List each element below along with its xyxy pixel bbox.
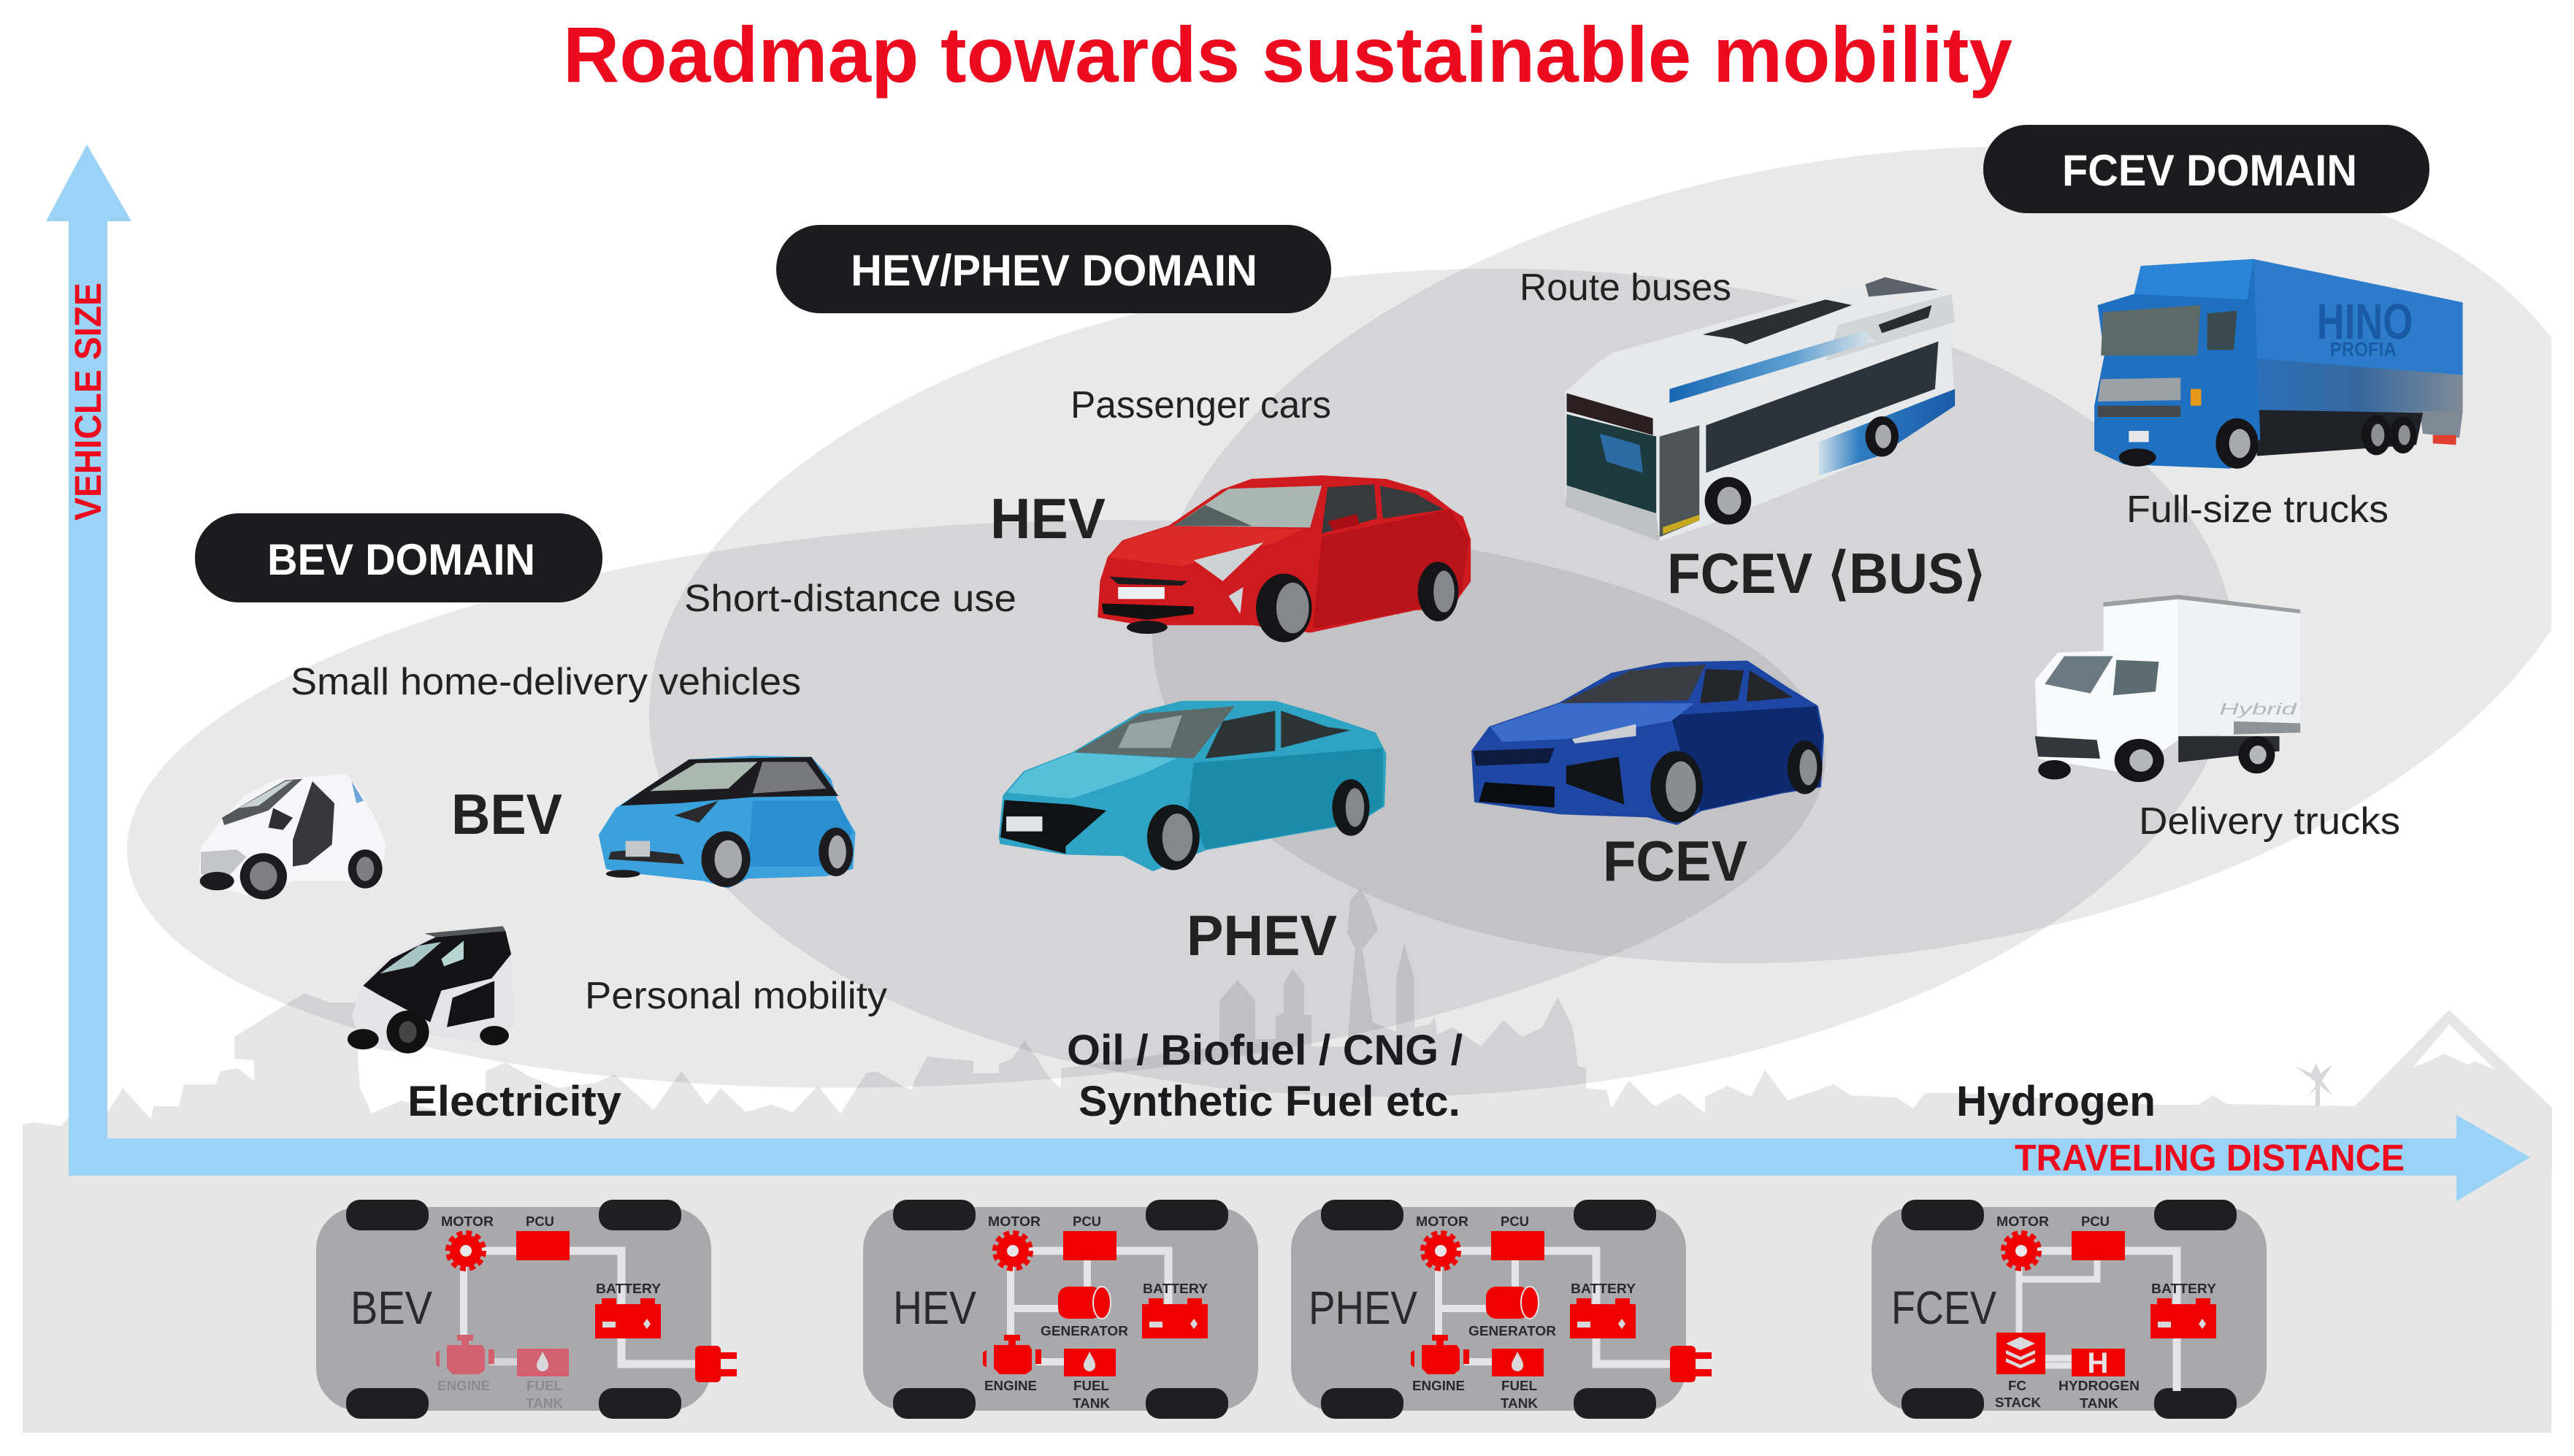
component labels: ENGINE: [984, 1379, 1037, 1393]
domain ellipses: [127, 147, 2551, 1097]
icon: plug: [695, 1346, 737, 1382]
pill: HEV/PHEV domain: HEV/PHEV DOMAIN: [851, 246, 1257, 295]
ground and skyline silhouette: [23, 889, 2552, 1433]
label: oil and fuels: [1067, 1027, 1463, 1125]
icon: fuel tank: [1492, 1349, 1544, 1376]
vehicle: black and white personal mobility: [348, 926, 514, 1054]
title: Roadmap towards sustainable mobility: [563, 10, 2012, 99]
component labels: BATTERY: [1571, 1281, 1636, 1296]
icon: motor: [2003, 1233, 2039, 1269]
vehicle: blue FCEV sedan: [1473, 662, 1823, 824]
panel: BEV domain ellipse: [127, 520, 1826, 1088]
icon: battery: [1570, 1298, 1636, 1338]
component labels: TANK: [2080, 1396, 2118, 1411]
component labels: HYDROGEN: [2058, 1379, 2140, 1393]
vehicle: white delivery truck: Hybrid: [2219, 700, 2297, 719]
component labels: MOTOR: [988, 1214, 1041, 1229]
label: PHEV type: PHEV: [1309, 1281, 1417, 1334]
vehicle: white delivery truck: [2035, 594, 2300, 782]
label: HEV type: HEV: [893, 1281, 976, 1334]
vehicle: red HEV sedan: [1100, 476, 1469, 642]
label: HEV: HEV: [990, 486, 1106, 551]
component labels: FUEL: [526, 1379, 562, 1393]
pill: FCEV domain: FCEV DOMAIN: [2062, 146, 2357, 195]
icon: PCU: [1063, 1231, 1116, 1260]
pill: HEV/PHEV domain: [776, 225, 1331, 313]
component labels: MOTOR: [1996, 1214, 2049, 1229]
component labels: BATTERY: [596, 1281, 661, 1296]
component labels: [984, 1214, 1208, 1411]
component labels: PCU: [1501, 1214, 1529, 1229]
vehicle: blue compact BEV: [599, 756, 856, 889]
component labels: FUEL: [1073, 1379, 1109, 1393]
icon: mountain snow cap: [2413, 1024, 2495, 1070]
icon: engine: [983, 1335, 1041, 1374]
component labels: PCU: [526, 1214, 554, 1229]
vehicle: blue full-size truck: [2094, 259, 2463, 469]
component labels: PCU: [2081, 1214, 2110, 1229]
label: FCEV: FCEV: [1603, 829, 1747, 893]
component labels: FUEL: [1501, 1379, 1537, 1393]
component labels: ENGINE: [437, 1379, 490, 1393]
label: BEV type: BEV: [351, 1281, 432, 1334]
label: passenger cars: Passenger cars: [1070, 384, 1331, 426]
vehicle: teal PHEV sedan: [1000, 702, 1384, 870]
powertrain diagram: PHEV: [1291, 1200, 1712, 1419]
component labels: [1995, 1214, 2216, 1411]
icon: palm tree: [2295, 1063, 2332, 1106]
component labels: TANK: [1501, 1396, 1538, 1411]
icon: PCU: [2072, 1231, 2125, 1260]
icon: faded engine: [436, 1335, 494, 1374]
icon: PCU: [1491, 1231, 1544, 1260]
vehicle: white open-top micro car: [199, 774, 386, 900]
component labels: BATTERY: [2151, 1281, 2216, 1296]
label: BEV: BEV: [451, 782, 562, 846]
component labels: FC: [2008, 1379, 2026, 1393]
label: small home-delivery vehicles: Small home-delivery vehicles: [291, 661, 801, 703]
component labels: ENGINE: [1412, 1379, 1465, 1393]
icon: battery: [1142, 1298, 1208, 1338]
vertical axis arrow: [46, 145, 131, 1176]
icon: PCU: [516, 1231, 570, 1260]
powertrain diagram: BEV: [316, 1200, 737, 1419]
component labels: [1412, 1214, 1636, 1411]
component labels: GENERATOR: [1041, 1324, 1128, 1338]
icon: generator: [1486, 1287, 1539, 1319]
label: PHEV: PHEV: [1187, 903, 1337, 968]
component labels: TANK: [1073, 1396, 1110, 1411]
label: route buses: Route buses: [1520, 267, 1731, 309]
icon: motor: [1422, 1233, 1459, 1269]
label: electricity: Electricity: [407, 1078, 621, 1125]
component labels: [437, 1214, 661, 1411]
component labels: STACK: [1995, 1395, 2041, 1410]
label: FCEV bus: FCEV ⟨BUS⟩: [1667, 541, 1985, 605]
component labels: MOTOR: [1416, 1214, 1468, 1229]
label: personal mobility: Personal mobility: [585, 975, 887, 1017]
component labels: TANK: [526, 1396, 563, 1411]
label: oil and fuels: Oil / Biofuel / CNG /: [1067, 1027, 1463, 1074]
icon: plug: [1670, 1346, 1712, 1382]
vehicle size axis label: VEHICLE SIZE: [67, 283, 109, 521]
label: FCEV type: FCEV: [1891, 1281, 1996, 1334]
icon: engine: [1411, 1335, 1469, 1374]
icon: motor: [448, 1233, 484, 1269]
component labels: MOTOR: [441, 1214, 494, 1229]
vehicle: blue full-size truck: PROFIA: [2330, 339, 2397, 361]
panel: HEV/PHEV domain ellipse: [649, 269, 2229, 1097]
icon: motor: [995, 1233, 1031, 1269]
component labels: BATTERY: [1143, 1281, 1208, 1296]
label: oil and fuels: Synthetic Fuel etc.: [1079, 1078, 1460, 1125]
pill: BEV domain: [195, 513, 602, 602]
icon: battery: [2150, 1298, 2216, 1338]
panel: FCEV domain ellipse: [1152, 147, 2551, 964]
pill: BEV domain: BEV DOMAIN: [267, 535, 535, 584]
icon: hydrogen tank: H: [2088, 1347, 2108, 1379]
icon: generator: [1058, 1287, 1111, 1319]
icon: battery: [595, 1298, 661, 1338]
label: delivery trucks: Delivery trucks: [2139, 800, 2400, 843]
powertrain diagram: FCEV: [1872, 1200, 2267, 1419]
icon: FC stack: [1996, 1333, 2045, 1374]
component labels: PCU: [1073, 1214, 1101, 1229]
component labels: GENERATOR: [1468, 1324, 1556, 1338]
label: hydrogen: Hydrogen: [1956, 1078, 2156, 1125]
icon: fuel tank: [1064, 1349, 1116, 1376]
icon: hydrogen tank: [2072, 1347, 2125, 1379]
vehicle: FCEV route bus: [1566, 277, 1955, 541]
label: full-size trucks: Full-size trucks: [2126, 488, 2389, 531]
pill: FCEV domain: [1983, 125, 2429, 213]
traveling distance axis label: TRAVELING DISTANCE: [2015, 1137, 2405, 1179]
icon: faded fuel tank: [517, 1349, 569, 1376]
horizontal axis arrow: [69, 1115, 2530, 1201]
label: short-distance use: Short-distance use: [684, 578, 1016, 620]
powertrain diagram: HEV: [863, 1200, 1258, 1419]
